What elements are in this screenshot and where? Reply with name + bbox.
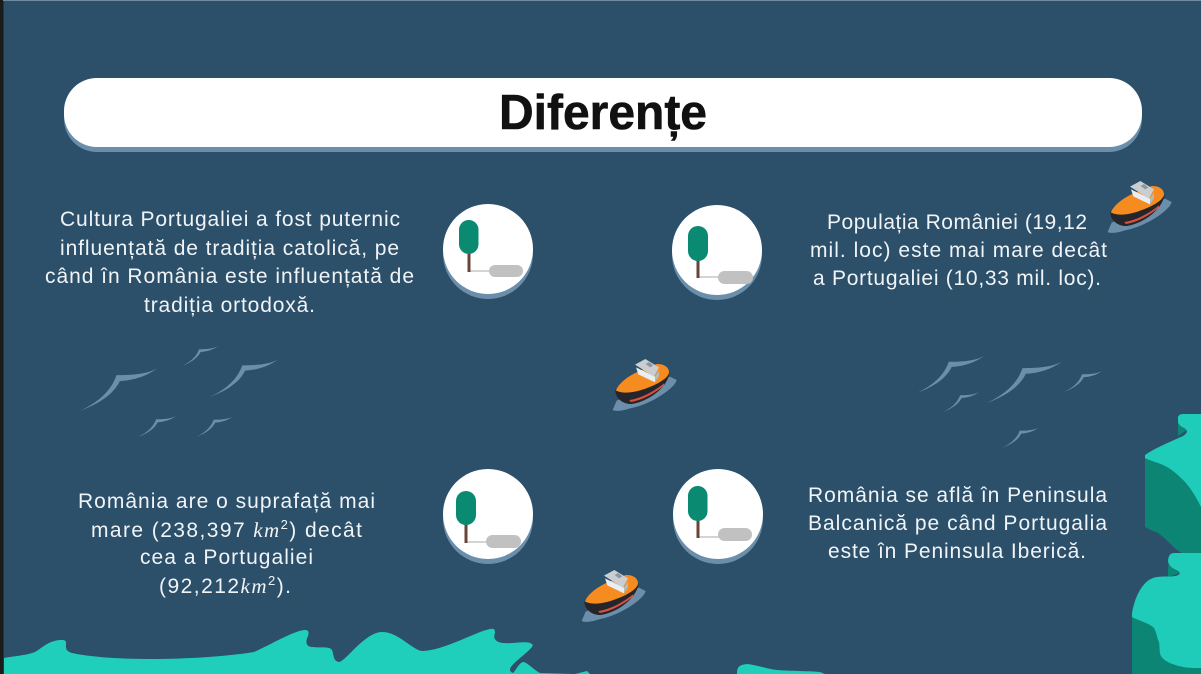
text block: surface: cea a Portugaliei [140,546,313,569]
text block: surface [78,490,375,598]
text block: peninsula [808,484,1107,563]
title: Diferențe [499,86,707,140]
text block: peninsula: este în Peninsula Iberică. [828,540,1086,563]
rocks, right edge [1132,414,1201,674]
text block: surface: ) decât [289,519,362,542]
icon: circle with tree, top left [443,204,533,299]
text block: culture: Cultura Portugaliei a fost puternic [60,208,400,231]
text block: culture: când în România este influențată de [45,265,414,288]
text block: surface: România are o suprafață mai [78,490,375,513]
text block: culture [45,208,414,317]
text block: surface: mare (238,397 km [91,518,279,542]
icon: circle with tree, bottom left [443,469,533,564]
text block: population: mil. loc) este mai mare decât [810,239,1107,262]
birds, left group [80,346,278,437]
icon: circle with tree, top right [672,205,762,300]
icon: boat, centre [613,359,677,411]
birds, right group [917,356,1102,448]
text block: culture: influențată de tradiția catolică, pe [60,237,399,260]
text block: peninsula: Balcanică pe când Portugalia [808,512,1107,535]
icon: circle with tree, bottom right [673,469,763,564]
text block: culture: tradiția ortodoxă. [144,294,315,317]
text block: peninsula: România se află în Peninsula [808,484,1107,507]
text block: surface: 2 [268,573,275,588]
text block: surface: ). [277,575,291,598]
text block: population: a Portugaliei (10,33 mil. loc). [813,267,1101,290]
icon: boat, bottom [582,570,646,622]
text block: population: Populația României (19,12 [827,211,1087,234]
text block: surface: 2 [281,517,288,532]
title banner [64,78,1142,152]
waves, bottom edge [4,629,825,674]
text block: surface: (92,212km [159,574,267,598]
icon: boat, top right [1108,181,1172,233]
text block: population [810,211,1107,290]
